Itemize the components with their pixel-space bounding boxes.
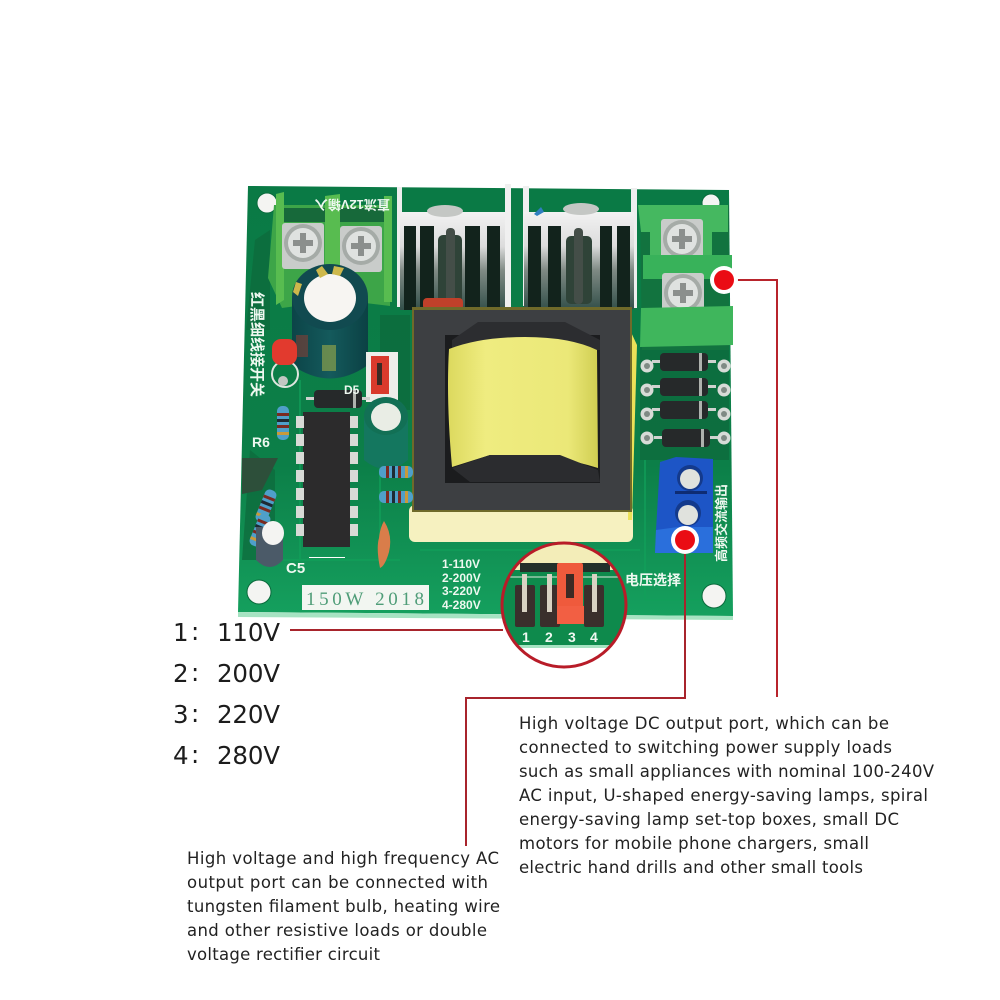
- icon: diode D5: [306, 390, 370, 408]
- label: switch wiring text: 红黑细线接开关: [248, 292, 266, 397]
- text block: DC output description: [519, 714, 935, 877]
- text block: AC output description: and other resistive loads or double: [187, 921, 487, 940]
- callout line: AC output port: [466, 553, 685, 846]
- icon: right heatsink: [505, 184, 637, 309]
- icon: small electrolytic capacitor: [256, 521, 284, 567]
- text block: DC output description: AC input, U-shaped energy-saving lamps, spiral: [519, 786, 928, 805]
- marker: AC output port: [671, 526, 699, 554]
- text block: DC output description: High voltage DC output port, which can be: [519, 714, 889, 733]
- jumper pin numbers: [522, 629, 598, 645]
- icon: output screw terminal: [638, 205, 733, 350]
- jumper pin numbers: 1: [522, 629, 530, 645]
- voltage legend: [173, 617, 280, 770]
- icon: red LED: [272, 339, 298, 387]
- icon: left heatsink: [397, 187, 505, 310]
- label: R6: R6: [252, 434, 270, 450]
- mounting holes: [247, 193, 726, 608]
- label: voltage list on board: 4-280V: [442, 598, 481, 612]
- icon: blue output terminal: [655, 457, 713, 553]
- voltage legend: 110V: [217, 618, 280, 647]
- jumper pin numbers: 2: [545, 629, 553, 645]
- icon: rectifier diodes: [640, 353, 730, 447]
- text block: AC output description: tungsten filament bulb, heating wire: [187, 897, 500, 916]
- voltage legend: 200V: [217, 659, 280, 688]
- icon: IC chip: [296, 412, 358, 558]
- icon: resistors: [248, 406, 413, 548]
- panel: circuit board: [238, 184, 733, 620]
- callout: jumper magnifier: [500, 540, 630, 670]
- voltage legend: 2: [173, 659, 189, 688]
- voltage legend: 220V: [217, 700, 280, 729]
- icon: ceramic capacitor: [378, 521, 390, 568]
- icon: small capacitor: [364, 397, 408, 469]
- icon: dark transistor: [242, 458, 278, 494]
- icon: jumper header: [366, 352, 398, 402]
- label: voltage list on board: 3-220V: [442, 584, 481, 598]
- voltage legend: 3: [173, 700, 189, 729]
- label: voltage select text: 电压选择: [625, 572, 681, 588]
- icon: input screw terminal: [268, 192, 392, 308]
- text block: DC output description: such as small appliances with nominal 100-240V: [519, 762, 935, 781]
- jumper pin numbers: 4: [590, 629, 598, 645]
- callout line: DC output port: [735, 280, 777, 697]
- label: voltage list on board: 1-110V: [442, 557, 480, 571]
- text block: AC output description: High voltage and high frequency AC: [187, 849, 499, 868]
- label: voltage list on board: [442, 557, 481, 612]
- voltage legend: :: [191, 699, 199, 728]
- text block: AC output description: voltage rectifier circuit: [187, 945, 381, 964]
- voltage legend: :: [191, 658, 199, 687]
- label: HF AC output text: 高频交流输出: [714, 484, 729, 562]
- marker: DC output port: [710, 266, 738, 294]
- text block: AC output description: [187, 849, 500, 964]
- label: voltage list on board: 2-200V: [442, 571, 481, 585]
- voltage legend: 4: [173, 741, 189, 770]
- label: C5: C5: [286, 560, 305, 577]
- label: 150W 2018 plate: 150W 2018: [306, 589, 424, 610]
- text block: DC output description: electric hand drills and other small tools: [519, 858, 863, 877]
- board substrate: [238, 186, 733, 616]
- text block: DC output description: motors for mobile phone chargers, small: [519, 834, 869, 853]
- callout line: 110V to jumper: [290, 629, 503, 631]
- label: input text: 直流12V输入: [315, 197, 390, 212]
- voltage legend: :: [191, 617, 199, 646]
- text block: DC output description: energy-saving lamp set-top boxes, small DC: [519, 810, 899, 829]
- icon: large capacitor: [292, 264, 368, 378]
- voltage legend: 1: [173, 618, 189, 647]
- label: D5: D5: [344, 383, 360, 397]
- text block: DC output description: connected to switching power supply loads: [519, 738, 892, 757]
- jumper pin numbers: 3: [568, 629, 576, 645]
- icon: transformer: [409, 307, 637, 542]
- voltage legend: 280V: [217, 741, 280, 770]
- text block: AC output description: output port can be connected with: [187, 873, 488, 892]
- voltage legend: :: [191, 740, 199, 769]
